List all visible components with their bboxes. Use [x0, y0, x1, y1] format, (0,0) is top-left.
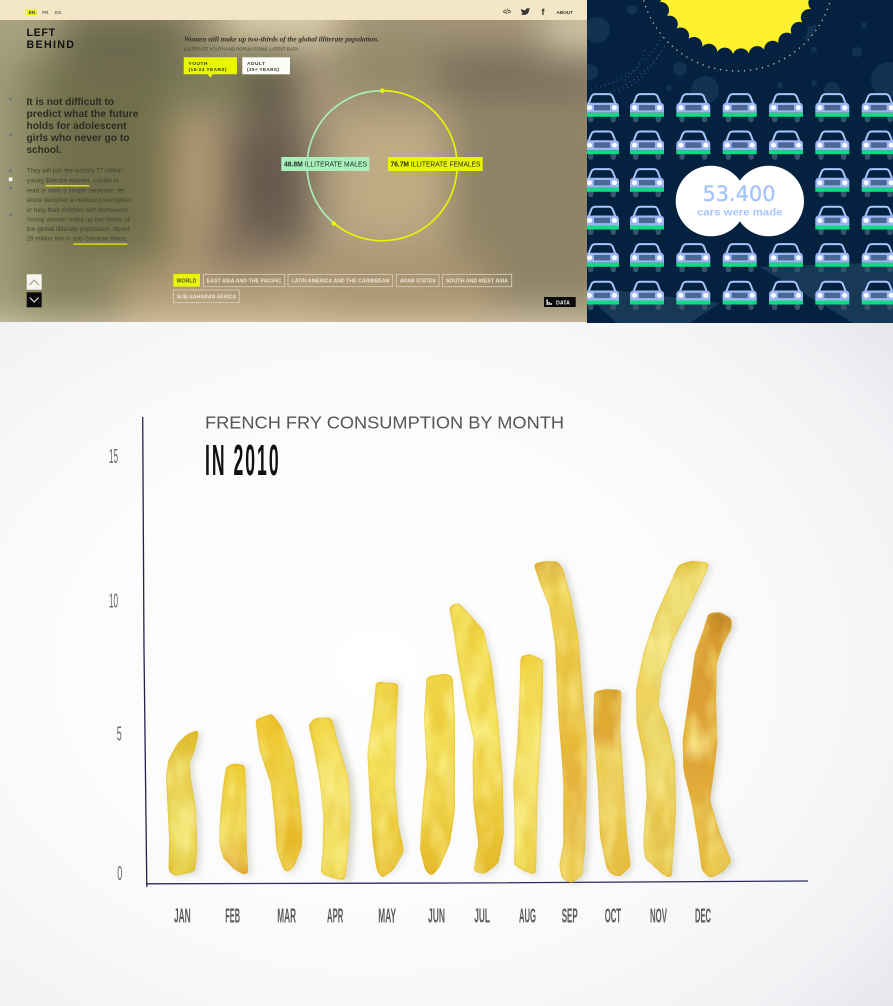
chart title: FRENCH FRY CONSUMPTION BY MONTH [205, 412, 564, 432]
language switcher [27, 10, 61, 15]
region filter: world [173, 274, 200, 287]
logo: LEFT [26, 27, 55, 39]
y axis labels: 10 [109, 590, 118, 612]
chart subheading: ILLITERATE YOUTH AND POPULATIONS, LATEST DATA [184, 46, 298, 52]
month labels: AUG [519, 906, 536, 928]
left headline: school. [26, 145, 62, 156]
callout: 53.400 cars were made: cars were made [697, 206, 783, 218]
region filter: world: WORLD [176, 278, 196, 284]
left headline: predict what the future [26, 109, 139, 120]
region filters: SOUTH AND WEST ASIA [446, 278, 508, 284]
panel: french fry chart: 0 [117, 863, 122, 885]
region filters [173, 274, 512, 303]
fry: Nov [636, 561, 713, 880]
data button: DATA [556, 300, 570, 306]
month labels: MAY [378, 906, 396, 928]
month labels [174, 906, 711, 928]
language switcher: ES [55, 10, 61, 15]
region filters: LATIN AMERICA AND THE CARIBBEAN [292, 278, 390, 284]
y axis labels [109, 446, 122, 885]
label: illiterate females [388, 157, 483, 171]
left body text: alone decipher a medical prescription [26, 197, 132, 204]
month labels: NOV [650, 906, 667, 928]
left headline: girls who never go to [26, 133, 130, 144]
month labels: JAN [174, 906, 191, 928]
fry: May [367, 680, 407, 878]
fry: Apr [308, 718, 356, 881]
fry: Feb [219, 763, 252, 876]
dotted swirl [592, 36, 666, 94]
left headline: It is not difficult to [26, 97, 114, 108]
month labels: OCT [605, 906, 621, 928]
panel: french fry chart: DEC [695, 906, 711, 928]
logo: BEHIND [26, 39, 74, 51]
share icons and about link [503, 8, 573, 15]
data button [544, 297, 576, 307]
label: illiterate females: 76.7M ILLITERATE FEMALES [390, 162, 481, 168]
x axis line [146, 881, 808, 884]
callout: 53.400 cars were made [676, 166, 804, 236]
tab: youth: YOUTH [188, 61, 208, 67]
left body text: or help their children with homework. [26, 207, 130, 214]
fries: Jan to May [166, 680, 407, 881]
left headline: holds for adolescent [26, 121, 127, 132]
paper background [0, 322, 893, 1006]
car grid [585, 94, 893, 310]
sun [660, 0, 816, 54]
dotted ring [640, 0, 834, 71]
region filters: EAST ASIA AND THE PACIFIC [207, 278, 281, 284]
y axis line [143, 417, 147, 887]
chart heading: Women still make up two-thirds of the global illiterate population. [184, 35, 379, 44]
logo [27, 28, 74, 48]
fry: Aug [513, 654, 546, 876]
left body text: 29 million live in sub-Saharan Africa. [26, 236, 128, 242]
active navigation dot [9, 178, 12, 181]
label: illiterate males: 48.8M ILLITERATE MALES [284, 162, 367, 168]
month labels: JUL [474, 906, 490, 928]
month labels: APR [327, 906, 344, 928]
left body text: young illiterate women, unable to [26, 178, 119, 184]
month labels: MAR [277, 906, 296, 928]
left headline [26, 97, 139, 156]
share icons and about link: </> [503, 9, 511, 16]
share icons and about link: f [542, 7, 546, 17]
language switcher: EN [29, 10, 36, 15]
callout: 53.400 cars were made: 53.400 [702, 182, 776, 206]
chart subtitle: IN 2010 [205, 437, 281, 486]
y axis labels: 5 [117, 724, 122, 746]
tab: adult: (15+ YEARS) [247, 67, 279, 73]
left body text: read or write a simple sentence, let [26, 188, 124, 194]
highlighted underlines [46, 185, 127, 245]
tab: youth [184, 57, 237, 78]
fry: Dec [683, 612, 735, 880]
background bubbles [582, 5, 893, 104]
left body text: They will join the world's 77 million [26, 168, 123, 174]
top bar [0, 0, 587, 20]
fries: Jun to Dec [420, 561, 735, 885]
y axis labels: 15 [109, 446, 118, 468]
tab: adult: ADULT [247, 61, 265, 67]
fry: Oct [593, 689, 634, 878]
fry: Mar [255, 713, 306, 874]
fry: Jan [166, 729, 203, 877]
fry: Sep [533, 561, 591, 885]
donut chart [307, 88, 457, 241]
month labels: JUN [428, 906, 445, 928]
fry: Jul [449, 602, 507, 875]
month labels: FEB [225, 906, 240, 928]
down arrow button [27, 292, 42, 307]
panel: cars per second [582, 0, 893, 323]
left body text: the global illiterate population. About [26, 226, 130, 233]
label: illiterate males [281, 157, 369, 171]
fry: Jun [420, 673, 455, 877]
language switcher: FR [42, 10, 49, 15]
background triangles [587, 262, 893, 323]
region filters: ARAB STATES [400, 278, 436, 284]
tab: youth: (15-24 YEARS) [188, 67, 227, 73]
left body text: Young women make up two-thirds of [26, 216, 130, 224]
navigation dots [9, 98, 12, 216]
tab: adult [242, 57, 290, 74]
left body text [26, 168, 132, 242]
blurred photo background [0, 20, 587, 322]
up arrow button [27, 274, 42, 290]
region filters: SUB-SAHARAN AFRICA [177, 294, 236, 300]
month labels: SEP [562, 906, 578, 928]
share icons and about link: ABOUT [556, 10, 573, 15]
panel: french fry chart [109, 412, 808, 928]
panel: Left Behind web page [0, 0, 587, 322]
